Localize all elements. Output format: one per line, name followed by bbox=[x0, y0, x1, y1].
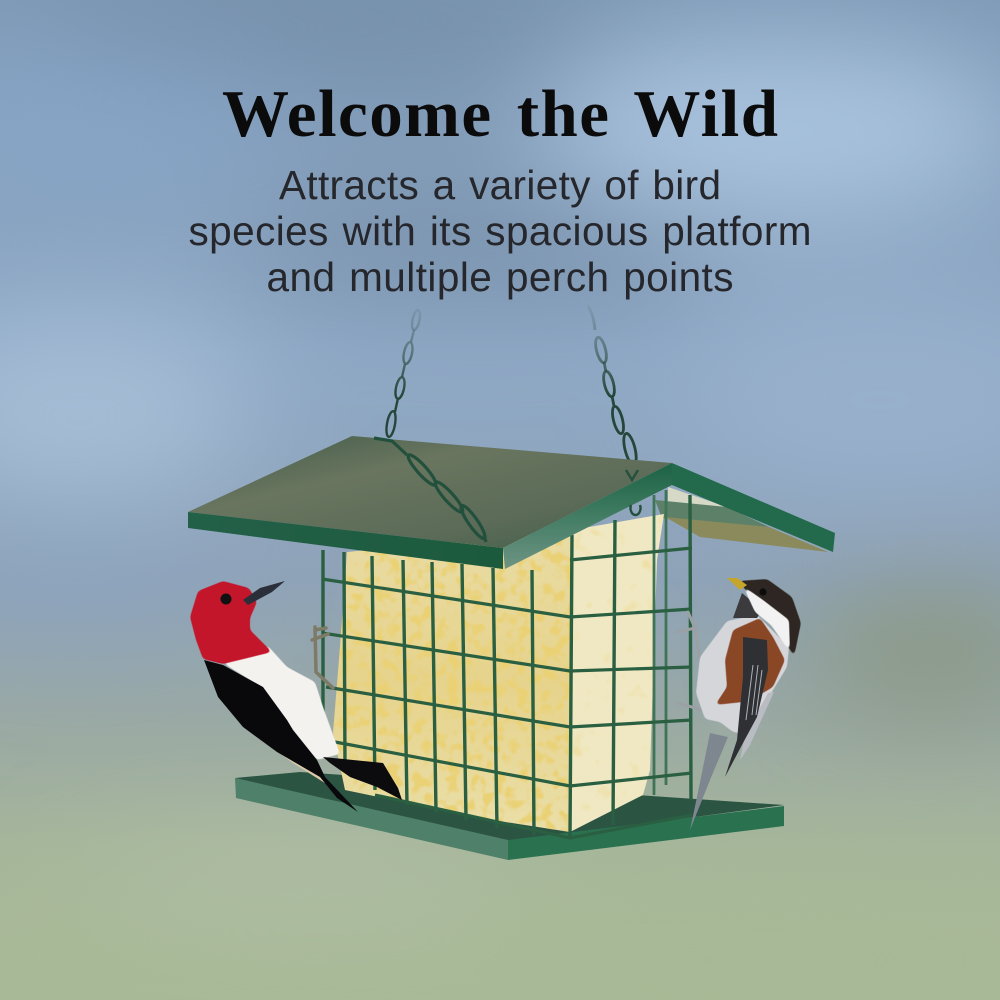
underside of roof bbox=[655, 487, 828, 552]
chain: left bbox=[385, 309, 422, 437]
roof bbox=[188, 436, 835, 569]
subtitle text block: species with its spacious platform bbox=[188, 208, 812, 254]
chain: right bbox=[588, 306, 639, 466]
suet cake bbox=[333, 514, 664, 832]
platform tray bbox=[235, 772, 784, 860]
bird: red-headed woodpecker bbox=[190, 581, 402, 812]
chain shadow on roof bbox=[374, 438, 488, 542]
subtitle text block: and multiple perch points bbox=[266, 254, 734, 300]
subtitle text block bbox=[188, 162, 812, 300]
subtitle text block: Attracts a variety of bird bbox=[279, 162, 721, 208]
wire cage bbox=[322, 490, 692, 838]
bird: chestnut-backed chickadee bbox=[678, 578, 801, 830]
title: Welcome the Wild bbox=[222, 77, 778, 151]
